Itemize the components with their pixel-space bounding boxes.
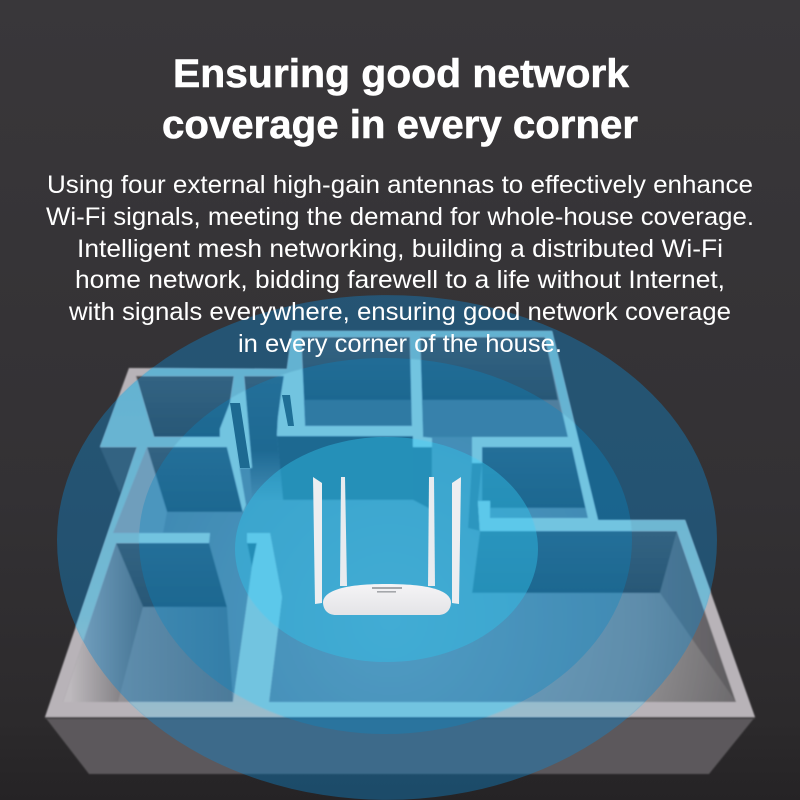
floor surface	[45, 331, 755, 717]
house floor plan base	[45, 331, 755, 774]
description text	[46, 171, 754, 358]
central wall face	[277, 436, 413, 500]
room R4 back wall	[482, 447, 586, 508]
lower right side wall	[660, 531, 736, 702]
room R1 floor	[304, 400, 412, 426]
signal ellipse: inner	[235, 437, 538, 662]
router body	[323, 584, 451, 615]
room C left wall	[63, 543, 143, 702]
router	[313, 477, 461, 615]
antenna inner left	[340, 477, 347, 586]
title: coverage in every corner	[162, 103, 638, 147]
lower right back wall	[472, 531, 677, 593]
signal ellipse: middle	[139, 358, 632, 734]
room B back wall	[147, 447, 243, 512]
description text: Intelligent mesh networking, building a distributed Wi-Fi	[77, 235, 723, 263]
wall face beside corridor	[230, 403, 250, 468]
short wall face	[468, 463, 482, 531]
description text: Wi-Fi signals, meeting the demand for whole-house coverage.	[46, 203, 754, 231]
wall end face	[413, 447, 432, 510]
room C back wall	[116, 543, 227, 607]
corridor back wall	[244, 376, 284, 500]
room A back wall	[136, 376, 234, 437]
exterior notch wall	[100, 447, 137, 493]
title: Ensuring good network	[173, 52, 630, 96]
antenna far left	[313, 477, 322, 604]
door notch	[247, 543, 257, 567]
room R2 back wall	[420, 337, 558, 400]
antenna far right	[452, 477, 461, 604]
description text: in every corner of the house.	[238, 330, 562, 358]
room C floor	[118, 607, 233, 702]
room R2 floor	[422, 400, 568, 437]
wall slit left of room R1	[282, 395, 294, 426]
wall tops outside signal	[45, 331, 755, 717]
antenna inner right	[428, 477, 435, 586]
description text: home network, bidding farewell to a life without Internet,	[75, 266, 725, 294]
router label	[372, 587, 402, 593]
room R1 back wall	[301, 337, 412, 400]
wall tops tinted by signal	[45, 331, 755, 717]
room B left wall	[113, 447, 167, 533]
title	[162, 52, 638, 147]
description text: Using four external high-gain antennas to effectively enhance	[47, 171, 753, 199]
description text: with signals everywhere, ensuring good network coverage	[68, 298, 731, 326]
exterior front wall	[45, 717, 755, 774]
signal ellipse: outer	[57, 295, 717, 800]
